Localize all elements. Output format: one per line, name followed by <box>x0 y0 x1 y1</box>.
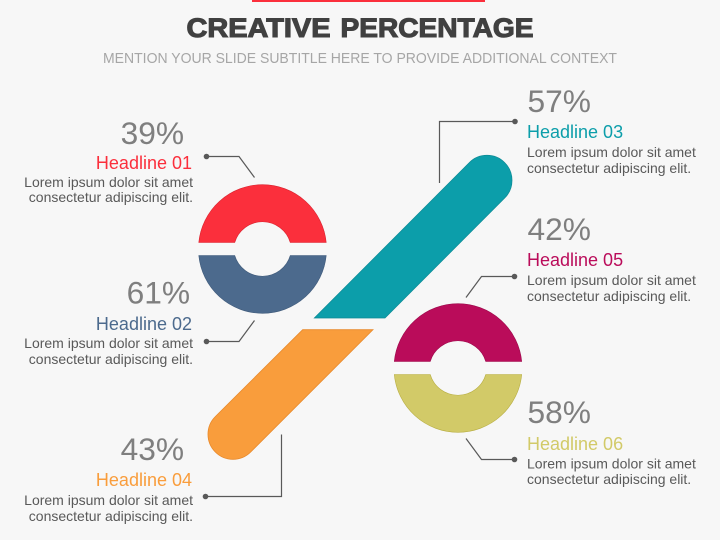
text block 05 <box>527 211 696 304</box>
text block 01: Headline 01 <box>96 153 192 173</box>
subtitle: MENTION YOUR SLIDE SUBTITLE HERE TO PROVIDE ADDITIONAL CONTEXT <box>103 51 617 67</box>
text block 06: 58% <box>528 394 591 430</box>
text block 01 <box>24 115 193 205</box>
connector 03 <box>440 119 518 183</box>
text block 04: Lorem ipsum dolor sit amet <box>24 492 193 508</box>
text block 06 <box>527 394 696 487</box>
text block 03: consectetur adipiscing elit. <box>527 160 691 176</box>
text block 02: consectetur adipiscing elit. <box>29 351 193 367</box>
title: CREATIVE <box>186 13 330 43</box>
connector 04 <box>203 434 282 499</box>
connector 05 <box>466 274 517 298</box>
ring top: magenta <box>394 304 522 362</box>
connector 02 <box>204 320 254 344</box>
text block 01: Lorem ipsum dolor sit amet <box>24 174 193 190</box>
text block 01: 39% <box>121 115 184 151</box>
text block 06: consectetur adipiscing elit. <box>527 471 691 487</box>
text block 03: 57% <box>528 83 591 119</box>
ring bottom: blue <box>199 256 326 313</box>
percent sign: lower-right ring <box>394 304 522 432</box>
connector 06 <box>466 438 517 462</box>
text block 05: 42% <box>528 211 591 247</box>
text block 06: Headline 06 <box>527 434 623 454</box>
percent sign: upper-left ring <box>199 185 326 313</box>
text block 05: Headline 05 <box>527 250 623 270</box>
text block 04: consectetur adipiscing elit. <box>29 508 193 524</box>
ring top: red <box>199 185 326 242</box>
ring bottom: olive <box>394 374 522 432</box>
text block 03 <box>527 83 696 176</box>
text block 02: 61% <box>127 274 190 310</box>
text block 02 <box>24 274 193 367</box>
text block 04: Headline 04 <box>96 470 192 490</box>
text block 02: Headline 02 <box>96 314 192 334</box>
text block 02: Lorem ipsum dolor sit amet <box>24 335 193 351</box>
text block 06: Lorem ipsum dolor sit amet <box>527 456 696 472</box>
text block 05: Lorem ipsum dolor sit amet <box>527 272 696 288</box>
title: PERCENTAGE <box>340 13 534 43</box>
connector 01 <box>204 154 254 178</box>
text block 04: 43% <box>121 431 184 467</box>
text block 03: Headline 03 <box>527 122 623 142</box>
top accent bar <box>252 0 485 2</box>
text block 03: Lorem ipsum dolor sit amet <box>527 144 696 160</box>
text block 05: consectetur adipiscing elit. <box>527 288 691 304</box>
text block 01: consectetur adipiscing elit. <box>29 189 193 205</box>
slash upper: teal <box>314 155 512 318</box>
text block 04 <box>24 431 193 524</box>
title <box>186 13 534 43</box>
slash lower: orange <box>208 330 373 459</box>
